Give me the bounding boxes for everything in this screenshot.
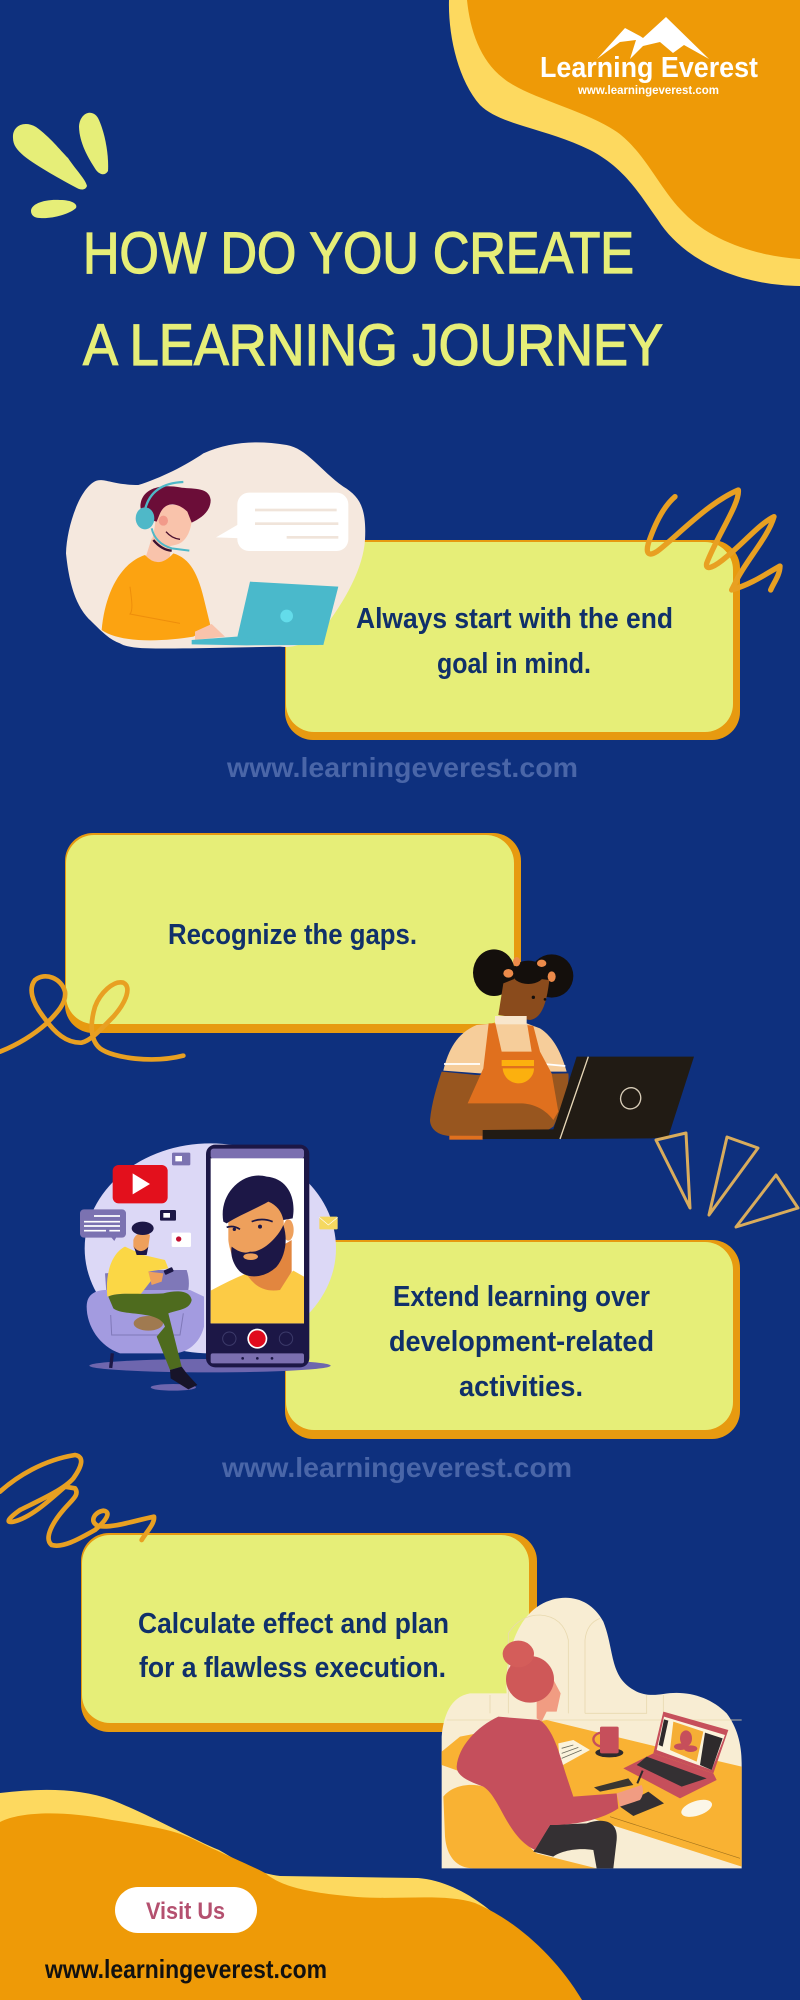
panel: step 3 card: Extend learning over	[393, 1281, 650, 1313]
logo: Learning Everest: Learning Everest	[540, 52, 758, 84]
illustration: girl with laptop	[430, 949, 694, 1140]
speech bubble	[216, 493, 348, 551]
laptop	[623, 1712, 728, 1798]
scribble: step 2	[0, 976, 183, 1059]
decorative triangles	[656, 1133, 798, 1227]
desk	[442, 1720, 742, 1867]
agent figure	[102, 482, 225, 640]
panel: step 2 card	[65, 833, 521, 1033]
panel: step 3 card	[285, 1240, 740, 1439]
button: Visit Us: Visit Us	[146, 1898, 225, 1925]
scribble: step 1	[647, 490, 780, 590]
seated man	[107, 1222, 197, 1389]
social icons	[80, 1153, 338, 1247]
illustration: man recording video on phone	[80, 1143, 338, 1391]
bottom-left corner blob	[0, 1790, 582, 2000]
woman figure	[457, 1641, 643, 1868]
logo: Learning Everest: www.learningeverest.com	[577, 83, 719, 97]
panel: step 3 card: activities.	[459, 1371, 583, 1403]
footer url: www.learningeverest.com	[44, 1954, 327, 1984]
title	[83, 221, 663, 378]
panel: step 2 card: Recognize the gaps.	[168, 919, 417, 951]
panel: step 3 card: development-related	[389, 1326, 654, 1358]
panel: step 1 card	[285, 540, 740, 740]
panel: step 4 card	[81, 1533, 537, 1732]
top-right corner blob	[449, 0, 800, 286]
phone	[206, 1145, 309, 1367]
chair	[443, 1785, 597, 1868]
illustration: woman working at desk	[442, 1598, 742, 1868]
title: HOW DO YOU CREATE	[83, 221, 634, 286]
watermark url 1: www.learningeverest.com	[226, 752, 578, 783]
icon: splash marks	[13, 113, 108, 218]
title: A LEARNING JOURNEY	[83, 313, 663, 378]
panel: step 4 card: for a flawless execution.	[139, 1652, 446, 1684]
desk items	[558, 1727, 714, 1820]
watermark url 2: www.learningeverest.com	[221, 1452, 572, 1483]
panel: step 1 card: Always start with the end	[356, 603, 673, 635]
laptop	[192, 582, 338, 645]
button: Visit Us	[115, 1887, 257, 1933]
logo: Learning Everest	[540, 17, 758, 97]
panel: step 1 card: goal in mind.	[437, 648, 591, 680]
armchair	[87, 1270, 204, 1368]
illustration: support agent with laptop	[66, 442, 365, 649]
scribble: step 4	[0, 1455, 154, 1546]
panel: step 4 card: Calculate effect and plan	[138, 1608, 449, 1640]
